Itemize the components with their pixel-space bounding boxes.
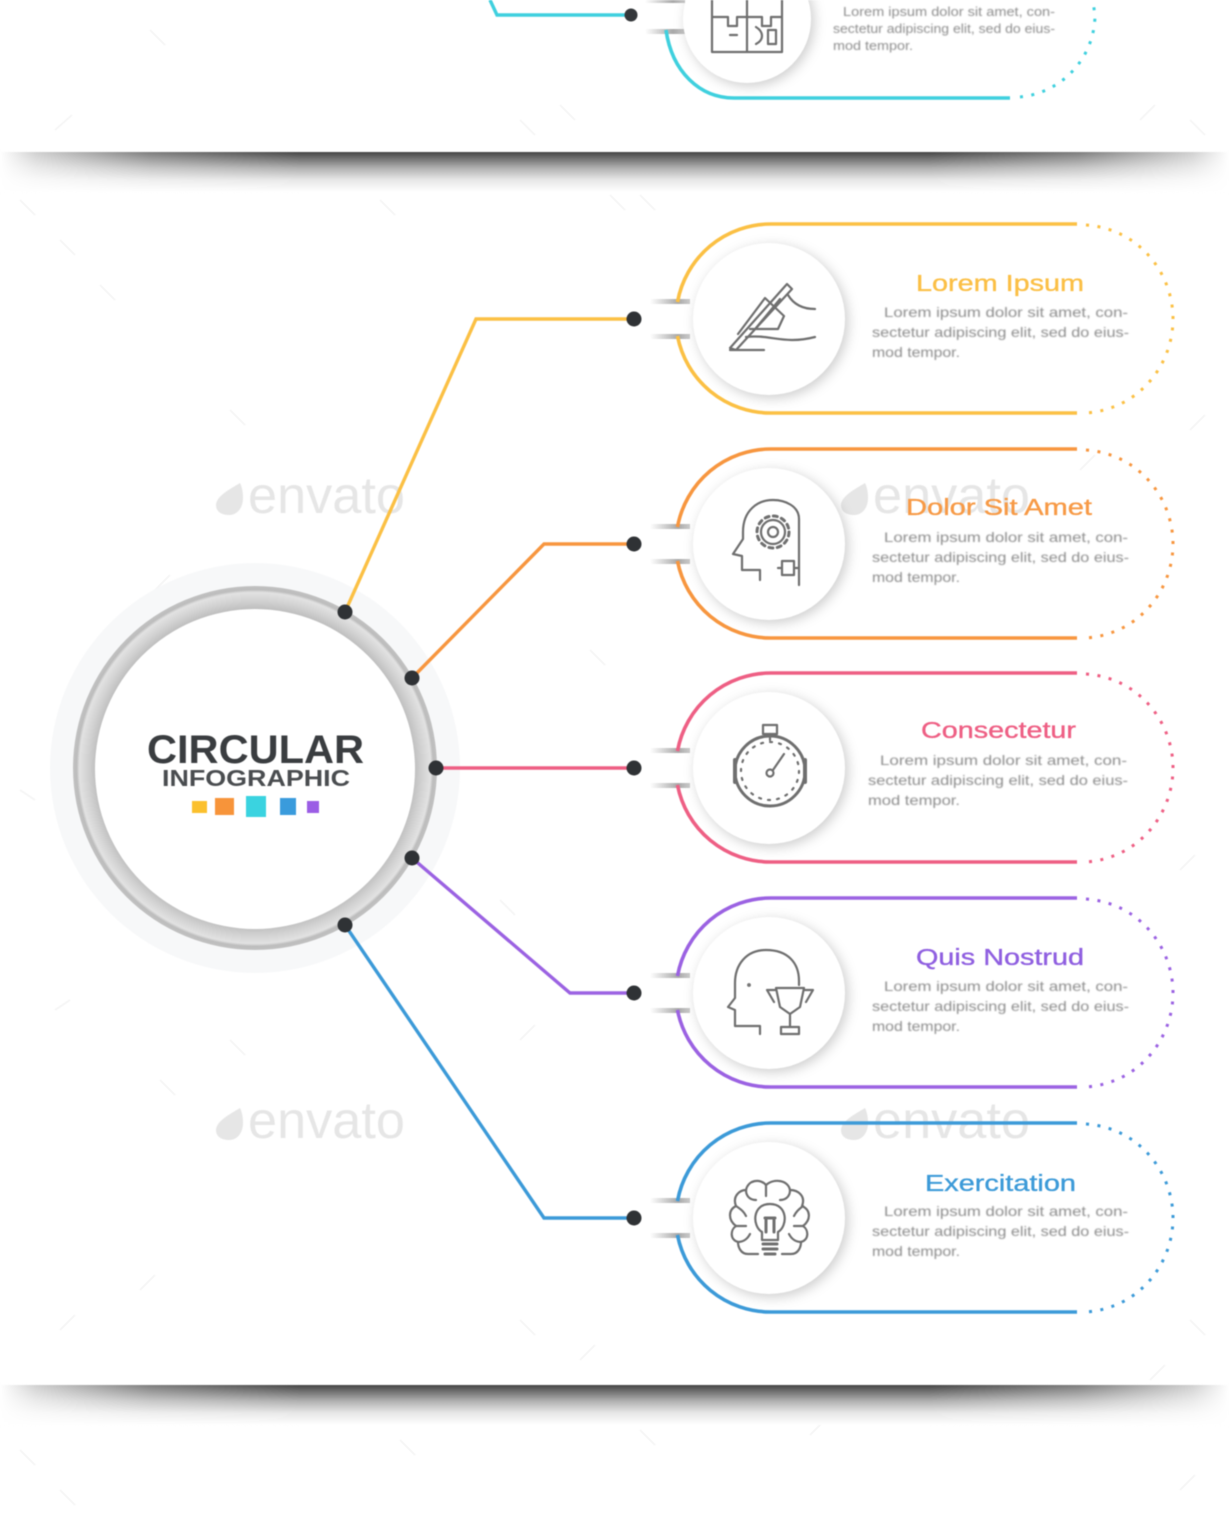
- body text: sectetur adipiscing elit, sed do eius-: [872, 549, 1129, 565]
- body text: [872, 304, 1129, 360]
- title: Exercitation: [925, 1170, 1076, 1196]
- dotted pill end: [1086, 899, 1173, 1087]
- body text: mod tempor.: [872, 344, 960, 360]
- subtitle: infographic: INFOGRAPHIC: [162, 765, 350, 791]
- body text: Lorem ipsum dolor sit amet, con-: [884, 529, 1128, 545]
- body text: sectetur adipiscing elit, sed do eius-: [868, 772, 1128, 788]
- dotted pill end: cyan: [1020, 0, 1095, 97]
- body text: Lorem ipsum dolor sit amet, con-: [884, 304, 1128, 320]
- icon card: [693, 468, 845, 620]
- icon: stopwatch: [735, 725, 805, 806]
- watermark: envato bottom right: envato: [873, 1092, 1030, 1150]
- body text: cyan item: Lorem ipsum dolor sit amet, con-: [843, 4, 1055, 19]
- body text: Lorem ipsum dolor sit amet, con-: [884, 978, 1128, 994]
- divider shadow: lower: [0, 1383, 1229, 1427]
- pill outline: cyan: [666, 30, 1010, 98]
- title: Lorem Ipsum: [916, 270, 1084, 296]
- icon card: puzzle: [683, 0, 811, 83]
- body text: cyan item: mod tempor.: [833, 38, 913, 53]
- title: Dolor Sit Amet: [906, 494, 1093, 520]
- dotted pill end: [1086, 1124, 1173, 1312]
- divider shadow: upper: [0, 150, 1229, 194]
- connector: pink: [428, 760, 642, 776]
- pill outline: [678, 224, 1077, 413]
- icon: puzzle: [712, 0, 782, 52]
- body text: [872, 529, 1129, 585]
- icon card: [693, 1142, 845, 1294]
- body text: [872, 978, 1129, 1034]
- body text: sectetur adipiscing elit, sed do eius-: [872, 998, 1129, 1014]
- body text: Lorem ipsum dolor sit amet, con-: [884, 1203, 1128, 1219]
- panel: cropped cyan item at top: [490, 0, 1095, 98]
- body text: [872, 1203, 1129, 1259]
- body text: mod tempor.: [868, 792, 960, 808]
- connector: cyan: [490, 0, 631, 15]
- item 1: lorem ipsum: [650, 224, 1173, 413]
- connector: purple: [404, 850, 642, 1000]
- body text: mod tempor.: [872, 1243, 960, 1259]
- icon: head with gears: [733, 500, 799, 585]
- connector: blue: [338, 918, 642, 1226]
- body text: mod tempor.: [872, 569, 960, 585]
- icon card: [693, 243, 845, 395]
- title: Consectetur: [921, 717, 1076, 743]
- colour squares: [192, 796, 319, 817]
- body text: cyan item: sectetur adipiscing elit, sed do eius-: [833, 21, 1055, 36]
- body text: mod tempor.: [872, 1018, 960, 1034]
- ring: [73, 586, 437, 950]
- item 3: consectetur: [650, 673, 1173, 862]
- pill outline: [678, 449, 1077, 638]
- central circle: [50, 563, 460, 973]
- body text: sectetur adipiscing elit, sed do eius-: [872, 1223, 1129, 1239]
- body text: cyan item: [833, 4, 1055, 53]
- watermark: envato bottom left: envato: [248, 1092, 405, 1150]
- watermark: envato top right: envato: [873, 467, 1030, 525]
- icon: brain with bulb: [730, 1181, 809, 1254]
- white disc: [95, 609, 415, 929]
- halo: [50, 563, 460, 973]
- pill outline: [678, 898, 1077, 1087]
- connector: yellow: [338, 312, 642, 620]
- connector: orange: [404, 536, 642, 686]
- body text: Lorem ipsum dolor sit amet, con-: [880, 752, 1127, 768]
- icon card: [693, 917, 845, 1069]
- item 4: quis nostrud: [650, 898, 1173, 1087]
- dotted pill end: [1086, 225, 1173, 413]
- icon: hand writing: [730, 284, 815, 350]
- title: circular: CIRCULAR: [147, 728, 364, 772]
- body text: sectetur adipiscing elit, sed do eius-: [872, 324, 1129, 340]
- dotted pill end: [1086, 674, 1173, 862]
- dotted pill end: [1086, 450, 1173, 638]
- body text: [868, 752, 1128, 808]
- icon card: [693, 692, 845, 844]
- item 2: dolor sit amet: [650, 449, 1173, 638]
- pill outline: [678, 1123, 1077, 1312]
- icon: head with trophy: [728, 950, 813, 1034]
- title: Quis Nostrud: [916, 944, 1084, 970]
- connector dot: cyan: [624, 8, 638, 22]
- pill outline: [678, 673, 1077, 862]
- item 5: exercitation: [650, 1123, 1173, 1312]
- watermark: envato top left: envato: [248, 467, 405, 525]
